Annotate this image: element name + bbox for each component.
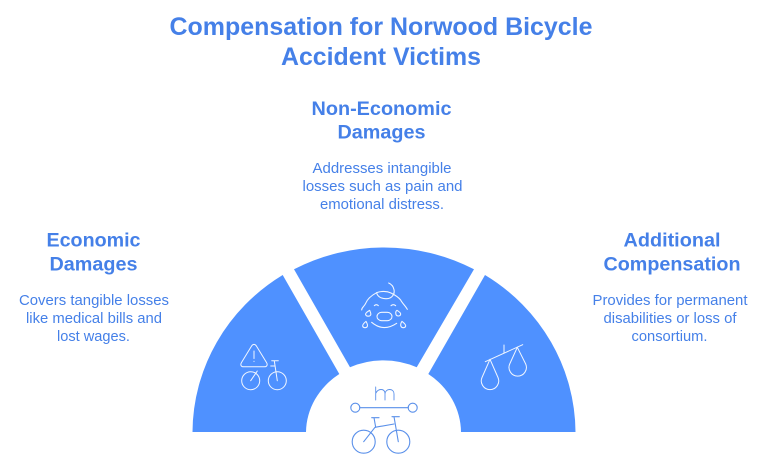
icon: letter-like arches [376,387,394,400]
text block: economic description [19,293,169,345]
panel: additional compensation [428,230,748,432]
wedge: additional compensation [428,275,576,432]
text block: additional compensation description [592,293,748,345]
icon: bicycle [352,417,410,453]
title [170,13,593,71]
text block: non-economic description: emotional distress. [320,197,444,213]
title: Accident Victims [281,43,481,71]
icon: balance scales [481,345,526,390]
heading: economic damages: Economic [46,230,141,252]
wedge: non-economic damages [294,247,474,367]
text block: additional compensation description: disabilities or loss of [604,311,737,327]
heading: non-economic damages [312,98,452,144]
center hub: bicycle icon [351,387,417,453]
text block: non-economic description: losses such as pain and [302,179,462,195]
panel: economic damages [19,230,339,432]
text block: economic description: lost wages. [57,329,130,345]
wedge: economic damages [192,275,339,432]
heading: economic damages: Damages [50,254,138,276]
icon: warning triangle and bicycle [241,344,286,390]
text block: non-economic description: Addresses intangible [312,161,452,177]
heading: non-economic damages: Damages [338,122,426,144]
heading: economic damages [46,230,141,276]
text block: economic description: Covers tangible losses [19,293,169,309]
heading: non-economic damages: Non-Economic [312,98,452,120]
icon: crying baby face [362,283,407,328]
text block: additional compensation description: Provides for permanent [592,293,748,309]
title: Compensation for Norwood Bicycle [170,13,593,41]
text block: economic description: like medical bills and [26,311,162,327]
heading: additional compensation: Compensation [604,254,740,276]
heading: additional compensation: Additional [624,230,720,252]
icon: connector line with end circles [351,403,417,412]
text block: additional compensation description: consortium. [632,329,708,345]
panel: non-economic damages [294,98,474,367]
text block: non-economic description [302,161,462,213]
heading: additional compensation [604,230,740,276]
